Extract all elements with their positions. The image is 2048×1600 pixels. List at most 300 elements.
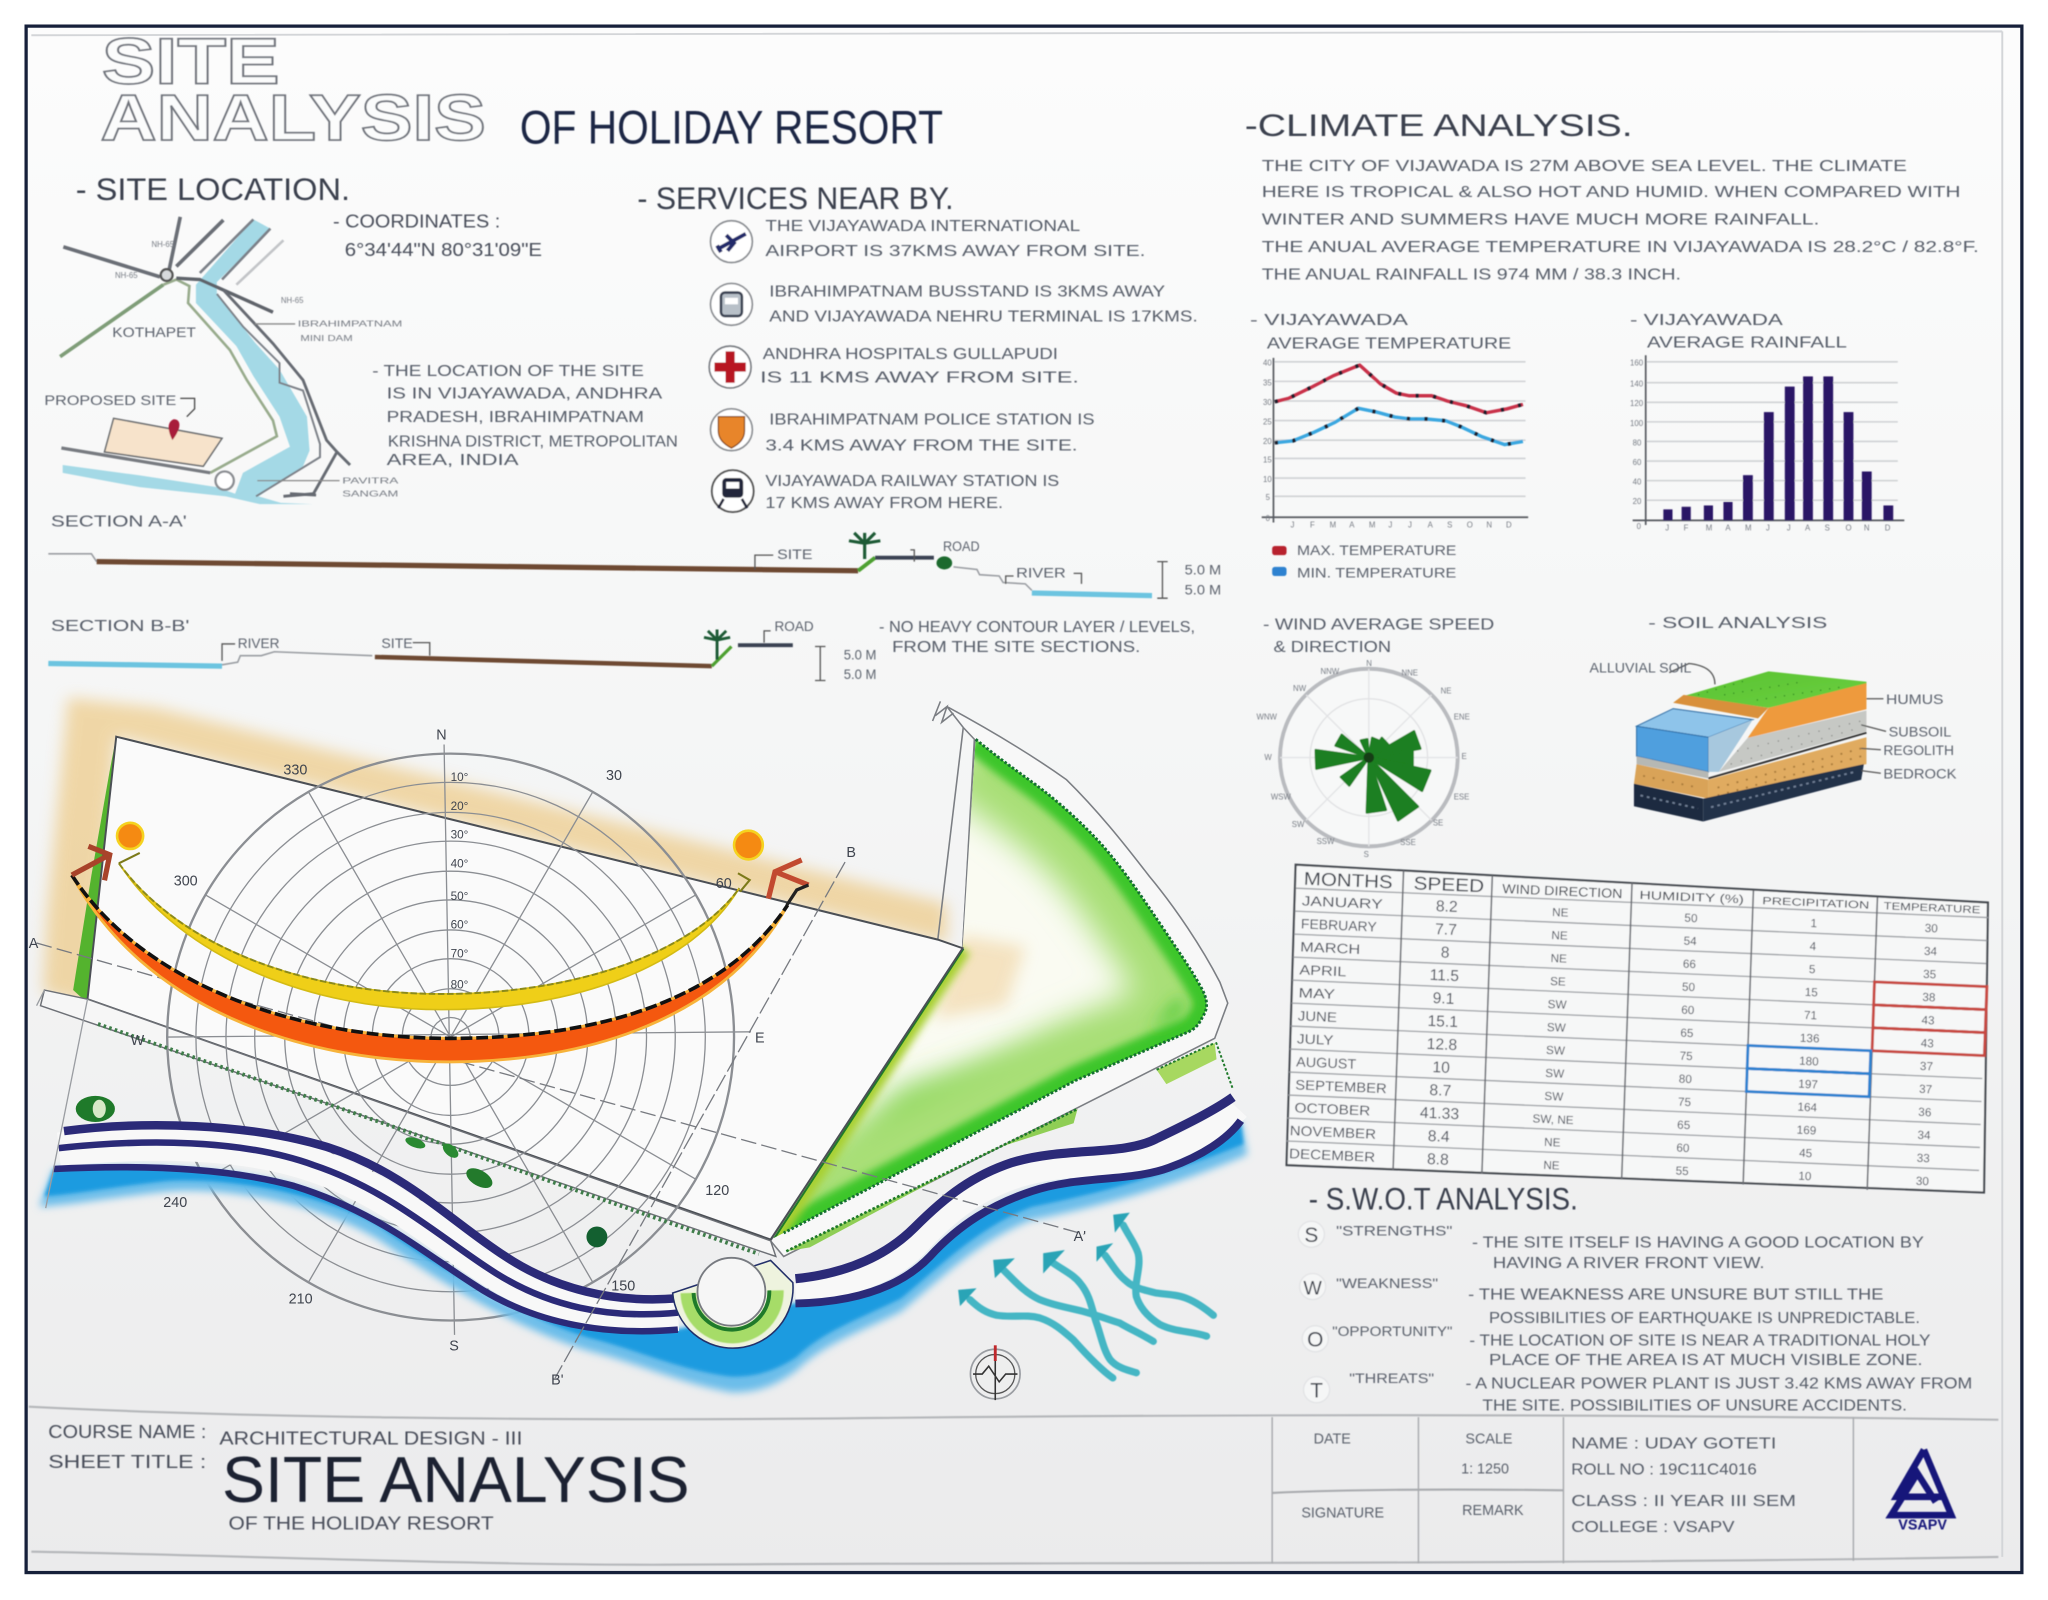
table rows: 8.7 [1429,1082,1451,1100]
sunrise and sunset markers [72,823,808,905]
compass labels [29,727,1086,1388]
table rows: 43 [1921,1014,1935,1027]
compass labels: 330 [283,763,307,779]
panel: services near by [637,181,1198,512]
table rows: 10 [1432,1059,1450,1077]
compass labels: B' [551,1372,564,1388]
threats [1304,1371,1972,1415]
section A-A': RIVER [1016,565,1066,580]
location description: KRISHNA DISTRICT, METROPOLITAN [388,434,678,451]
lawn corner patches [1157,1043,1217,1084]
compass labels: 120 [705,1183,729,1199]
chart: average rainfall: 0 [1637,522,1642,531]
circular terrace [673,1258,793,1348]
sheet subtitle: OF THE HOLIDAY RESORT [229,1512,494,1533]
table rows: 60 [1681,1004,1695,1017]
panel: soil analysis: BEDROCK [1883,766,1957,781]
table rows: 34 [1924,945,1938,958]
table rows: 45 [1799,1147,1813,1160]
chart: average temperature: J [1408,521,1412,530]
table rows: NE [1552,906,1569,920]
table rows: 37 [1919,1083,1932,1096]
compass labels: 30° [451,829,468,842]
chart: average rainfall: 120 [1630,399,1644,408]
chart: average rainfall: M [1706,523,1712,532]
compass labels: A' [1074,1229,1086,1245]
sun path: winter arc [119,863,739,1010]
chart: average rainfall: O [1846,523,1852,532]
opportunity: PLACE OF THE AREA IS AT MUCH VISIBLE ZONE. [1489,1352,1923,1369]
compass labels: 30 [606,768,622,784]
service text: airport [765,218,1145,260]
table rows: 75 [1678,1096,1692,1109]
service text: railway: 17 KMS AWAY FROM HERE. [765,495,1003,512]
chart: average temperature: 30 [1263,398,1272,407]
date and scale cells: DATE [1314,1431,1351,1447]
chart: wind rose: NW [1293,684,1307,693]
course details: SHEET TITLE : [48,1451,206,1472]
icon: bus [711,283,752,325]
service text: police: 3.4 KMS AWAY FROM THE SITE. [765,438,1078,455]
location map: MINI DAM [300,334,353,343]
rainfall bars [1663,376,1893,520]
heading: services: - SERVICES NEAR BY. [637,181,953,216]
chart: average temperature: F [1310,521,1315,530]
course details [48,1421,522,1472]
section B-B': ROAD [775,619,814,634]
trees [76,1096,607,1247]
table rows: SW [1547,998,1568,1012]
table rows: JANUARY [1302,893,1383,912]
location map: SANGAM [342,489,398,498]
strengths [1298,1221,1925,1272]
table rows: 35 [1923,968,1937,981]
chart: average rainfall: J [1787,523,1791,532]
weakness: "WEAKNESS" [1336,1276,1438,1291]
service text: bus stand: IBRAHIMPATNAM BUSSTAND IS 3KMS AWAY [769,283,1166,300]
service text: railway: VIJAYAWADA RAILWAY STATION IS [765,473,1059,490]
service text: hospital [760,346,1079,387]
location map: NH-65 [281,296,304,305]
chart: average rainfall: A [1805,523,1811,532]
compass labels: 60° [451,919,468,932]
course details: ARCHITECTURAL DESIGN - III [219,1428,522,1449]
table rows: NE [1544,1136,1561,1150]
chart: wind rose: S [1364,850,1369,859]
threats: THE SITE. POSSIBILITIES OF UNSURE ACCIDENTS. [1482,1398,1907,1415]
chart: average rainfall: J [1665,523,1669,532]
location description [372,363,678,469]
chart: wind rose: ENE [1454,713,1470,722]
service text: hospital: ANDHRA HOSPITALS GULLAPUDI [763,346,1058,363]
icon: airport [711,221,752,263]
chart: wind rose: SE [1433,818,1443,827]
wind petals [1316,731,1430,820]
title block [29,1407,1998,1565]
location description: PRADESH, IBRAHIMPATNAM [387,409,644,426]
table rows: 34 [1917,1129,1931,1142]
compass labels: 150 [611,1278,635,1294]
chart: average rainfall: J [1766,523,1770,532]
table header: WIND DIRECTION [1502,881,1623,901]
panel: soil analysis: ALLUVIAL SOIL [1590,661,1692,676]
table rows: 4 [1809,940,1817,953]
sun path diagram grid [167,744,751,1335]
section B-B': 5.0 M [844,648,876,663]
heading: climate: -CLIMATE ANALYSIS. [1245,108,1633,143]
chart: wind rose: SSE [1400,838,1416,847]
location description: IS IN VIJAYAWADA, ANDHRA [387,385,663,402]
compass labels: 210 [289,1292,313,1308]
chart: average rainfall: AVERAGE RAINFALL [1647,334,1847,351]
location map: NH-65 [115,271,138,280]
table rows: SW [1545,1067,1565,1081]
table rows: 9.1 [1432,990,1455,1008]
table rows: 15 [1805,986,1819,999]
logo [1891,1450,1951,1533]
ochre vegetation wash [43,697,947,1006]
icon: railway [712,470,754,512]
section A-A': SECTION A-A' [51,513,187,530]
min temperature line [1275,408,1523,445]
climate description: WINTER AND SUMMERS HAVE MUCH MORE RAINFALL. [1262,212,1819,229]
opportunity: "OPPORTUNITY" [1332,1324,1453,1339]
service text: hospital: IS 11 KMS AWAY FROM SITE. [760,370,1079,387]
contour note: - NO HEAVY CONTOUR LAYER / LEVELS, [879,619,1195,636]
lower road band [40,990,776,1256]
date and scale cells: SCALE [1465,1431,1513,1447]
opportunity: - THE LOCATION OF SITE IS NEAR A TRADITIONAL HOLY [1469,1332,1931,1349]
table rows: 65 [1680,1027,1694,1040]
table rows: 164 [1797,1101,1818,1115]
table rows: NE [1551,929,1568,943]
table rows: SW [1547,1021,1567,1035]
service text: airport: THE VIJAYAWADA INTERNATIONAL [765,218,1081,235]
student details: ROLL NO : 19C11C4016 [1571,1462,1757,1479]
table rows: 66 [1683,958,1697,971]
site polygon [88,737,963,1240]
compass labels: 240 [163,1195,187,1211]
chart: wind rose: & DIRECTION [1273,639,1391,656]
compass labels: A [29,936,39,952]
coordinates: 6°34'44"N 80°31'09"E [345,239,542,260]
chart: average temperature: S [1447,521,1452,530]
service text: railway [765,473,1059,512]
weakness: - THE WEAKNESS ARE UNSURE BUT STILL THE [1468,1287,1883,1304]
panel: soil analysis: - SOIL ANALYSIS [1648,615,1827,632]
table rows: 55 [1675,1165,1689,1178]
date and scale cells [1301,1431,1524,1522]
table rows: MAY [1298,985,1335,1002]
table rows: 50 [1684,912,1698,925]
contour note: FROM THE SITE SECTIONS. [892,639,1140,656]
coordinates: - COORDINATES : [333,210,500,231]
table rows: 180 [1799,1055,1819,1069]
table rows: NE [1550,952,1567,966]
compass labels: 60 [716,876,732,892]
section A-A' [48,513,1221,598]
table rows: 30 [1925,922,1939,935]
left green strip [73,737,116,1003]
chart: wind rose: W [1264,753,1272,762]
chart: average temperature: 10 [1263,475,1272,484]
lawn [774,741,1207,1238]
chart: average rainfall: - VIJAYAWADA [1630,312,1784,329]
strengths: - THE SITE ITSELF IS HAVING A GOOD LOCATION BY [1472,1234,1925,1251]
table rows: 5 [1809,963,1816,976]
panel: site location [44,172,678,504]
table rows: SW, NE [1532,1112,1574,1127]
table rows: 12.8 [1426,1036,1458,1054]
section A-A': ROAD [943,539,980,554]
chart: average temperature: O [1467,521,1473,530]
icon: police [711,409,752,451]
table rows: FEBRUARY [1301,916,1377,935]
chart: wind rose: WSW [1271,792,1291,801]
location description: - THE LOCATION OF THE SITE [372,363,644,380]
chart: wind rose: ESE [1454,792,1469,801]
date and scale cells: REMARK [1462,1503,1524,1519]
palm tree [704,630,730,660]
climate description [1262,158,1979,284]
student details: COLLEGE : VSAPV [1571,1519,1735,1536]
location map: NH-65 [152,240,175,249]
table rows: AUGUST [1296,1054,1357,1072]
chart: average temperature: D [1506,521,1512,530]
student details [1571,1435,1796,1536]
compass labels: S [449,1339,459,1355]
heading: swot: - S.W.O.T ANALYSIS. [1309,1181,1578,1216]
chart: average temperature: A [1428,521,1434,530]
climate description: THE ANUAL AVERAGE TEMPERATURE IN VIJAYAWADA IS 28.2°C / 82.8°F. [1262,239,1979,256]
service text: airport: AIRPORT IS 37KMS AWAY FROM SITE. [765,243,1145,260]
chart: average temperature [1250,312,1528,580]
section B-B': 5.0 M [844,667,876,682]
section line A-A' [37,943,1084,1234]
legend [1272,543,1456,580]
legend: MAX. TEMPERATURE [1297,543,1456,558]
chart: wind rose: NNW [1320,667,1340,676]
threats: - A NUCLEAR POWER PLANT IS JUST 3.42 KMS AWAY FROM [1465,1375,1972,1392]
table header: MONTHS [1304,868,1393,892]
panel: swot analysis [1298,1181,1972,1415]
chart: average rainfall: F [1684,523,1689,532]
sheet title: SITE ANALYSIS [222,1443,690,1516]
table rows: 8.2 [1436,898,1458,916]
table rows: SEPTEMBER [1295,1077,1387,1096]
table rows: 8.8 [1427,1151,1449,1169]
table rows: JUNE [1297,1008,1337,1025]
chart: average temperature: 0 [1266,514,1271,523]
legend: MIN. TEMPERATURE [1297,565,1456,580]
student details: CLASS : II YEAR III SEM [1571,1493,1796,1510]
chart: average temperature: J [1388,521,1392,530]
table header: PRECIPITATION [1762,896,1869,912]
table rows: MARCH [1300,939,1361,957]
chart: average temperature: M [1330,521,1336,530]
table rows: 41.33 [1420,1105,1460,1123]
table rows: 7.7 [1435,921,1457,939]
location map: PROPOSED SITE [44,393,176,408]
opportunity: O [1307,1329,1323,1352]
panel: soil analysis: SUBSOIL [1889,725,1952,740]
navy stripes [64,1125,678,1299]
section line B-B' [555,862,845,1378]
student details: NAME : UDAY GOTETI [1571,1435,1776,1452]
map pin [169,419,179,440]
contour note [879,619,1195,656]
table rows: 80 [1679,1073,1693,1086]
water [39,1121,1247,1392]
location map [44,217,402,504]
table rows: 1 [1810,917,1817,930]
table rows: APRIL [1299,962,1347,979]
chart: wind rose: WNW [1256,713,1278,722]
chart: wind rose [1256,617,1494,859]
location description: AREA, INDIA [387,452,519,469]
compass labels: 20° [451,800,468,813]
table header: SPEED [1413,872,1484,896]
table rows: 15.1 [1427,1013,1458,1031]
table rows: SW [1544,1090,1564,1104]
compass labels: 300 [174,874,198,890]
wind flow arrows [958,1213,1213,1378]
compass labels: N [436,727,447,743]
chart: average temperature: M [1369,521,1375,530]
title word: analysis: ANALYSIS [101,81,486,154]
river bank stripes [54,1097,1241,1331]
service text: bus stand [769,283,1198,325]
table rows: 8 [1440,944,1450,962]
chart: average temperature: AVERAGE TEMPERATURE [1267,336,1511,353]
section B-B' [48,618,876,682]
table rows: 50 [1682,981,1696,994]
panel: soil analysis: HUMUS [1886,692,1944,707]
site plan with sun path [29,697,1247,1400]
chart: average rainfall: 140 [1630,380,1644,389]
course details: COURSE NAME : [48,1421,206,1442]
chart: wind rose: - WIND AVERAGE SPEED [1263,617,1494,634]
service text: bus stand: AND VIJAYAWADA NEHRU TERMINAL IS 17KMS. [769,308,1198,325]
chart: wind rose: N [1366,659,1372,668]
chart: average rainfall: A [1725,523,1731,532]
panel: climate analysis [1245,108,1979,284]
weakness [1300,1273,1920,1327]
compass labels: E [755,1030,765,1046]
service text: police: IBRAHIMPATNAM POLICE STATION IS [769,411,1095,428]
chart: average temperature: N [1486,521,1492,530]
chart: average temperature: 25 [1263,417,1272,426]
section B-B': SITE [381,636,413,651]
compass labels: 70° [451,947,468,960]
chart: average rainfall: S [1825,523,1830,532]
max temperature line [1275,365,1523,413]
section B-B': SECTION B-B' [51,618,189,635]
table rows: OCTOBER [1294,1100,1371,1119]
highlighted peak precipitation cells [1746,1046,1871,1097]
weakness: POSSIBILITIES OF EARTHQUAKE IS UNPREDICTABLE. [1489,1310,1920,1327]
panel: soil analysis [1590,615,1957,822]
chart: average rainfall: N [1864,523,1870,532]
threats: "THREATS" [1349,1371,1434,1386]
compass labels: 10° [451,771,468,784]
chart: average temperature: 35 [1263,378,1272,387]
climate description: HERE IS TROPICAL & ALSO HOT AND HUMID. WHEN COMPARED WITH [1262,184,1960,201]
chart: average temperature: - VIJAYAWADA [1250,312,1409,329]
climate description: THE CITY OF VIJAWADA IS 27M ABOVE SEA LEVEL. THE CLIMATE [1262,158,1907,175]
table header: TEMPERATURE [1883,901,1981,916]
table header [1304,868,1981,917]
chart: average temperature: A [1349,521,1355,530]
table rows: 197 [1798,1078,1818,1092]
chart: average rainfall: 20 [1633,497,1642,506]
chart: wind rose: SSW [1317,837,1335,846]
chart: average temperature: 20 [1263,437,1272,446]
title subtitle: OF HOLIDAY RESORT [520,101,943,154]
section A-A': SITE [777,547,812,562]
section A-A': 5.0 M [1185,582,1221,597]
table rows: 38 [1922,991,1936,1004]
table rows: 33 [1916,1152,1930,1165]
table: monthly climate data [1286,865,1990,1195]
north compass [970,1345,1020,1400]
table rows: SE [1550,975,1566,989]
date and scale cells: 1: 1250 [1461,1461,1509,1477]
table rows: DECEMBER [1289,1146,1376,1165]
icon: hospital [709,346,751,388]
table rows: 8.4 [1428,1128,1450,1146]
chart: average rainfall: 100 [1630,419,1644,428]
compass labels: B [846,845,856,861]
title word: site: SITE [102,25,280,98]
chart: average temperature: J [1290,521,1294,530]
road edge west [37,990,88,1208]
table rows: NE [1543,1159,1560,1173]
road break mark [933,701,975,948]
table rows: 65 [1677,1119,1691,1132]
panel: soil analysis: REGOLITH [1883,743,1954,758]
table rows: 30 [1916,1175,1930,1188]
chart: average rainfall: M [1745,523,1752,532]
sun path: summer arc [72,875,788,1062]
table rows: 75 [1679,1050,1693,1063]
weakness: W [1303,1277,1322,1299]
chart: average temperature: 5 [1266,493,1271,502]
hedge [98,1024,759,1254]
compass labels: W [131,1033,145,1049]
table rows: 71 [1804,1009,1817,1022]
chart: wind rose: NE [1441,687,1452,696]
location map: KOTHAPET [112,325,197,340]
lawn hedge [784,739,1207,1233]
table rows: 54 [1683,935,1697,948]
table rows: 36 [1918,1106,1932,1119]
chart: average rainfall: 80 [1633,438,1642,447]
table rows: 136 [1800,1032,1820,1046]
climate description: THE ANUAL RAINFALL IS 974 MM / 38.3 INCH. [1262,267,1681,284]
chart: wind rose: SW [1292,820,1305,829]
chart: average rainfall: D [1885,523,1891,532]
soil block diagram [1634,664,1886,822]
table header: HUMIDITY (%) [1639,889,1744,906]
proposed site plot [104,418,222,466]
table rows [1289,892,1939,1189]
palm tree [849,533,880,559]
compass labels: 50° [451,890,468,903]
chart: average rainfall: 160 [1630,359,1644,368]
chart: average temperature: 15 [1263,455,1272,464]
table rows: NOVEMBER [1290,1123,1376,1142]
